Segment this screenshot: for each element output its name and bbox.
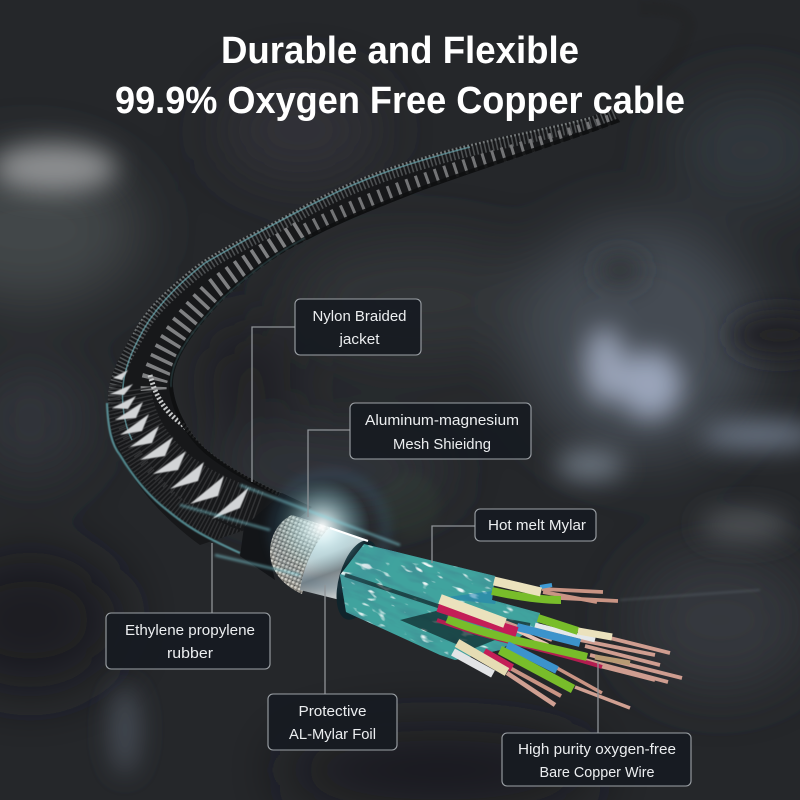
cable: nylon braided jacket	[90, 8, 689, 570]
inner shadow edge	[173, 122, 620, 495]
callout: nylon braided jacket: Nylon Braided	[312, 309, 406, 325]
callout: bare copper wire	[502, 662, 691, 786]
teal highlight	[123, 147, 470, 440]
callout: nylon braided jacket: jacket	[338, 332, 380, 348]
title line 2: 99.9% Oxygen Free Copper cable	[115, 80, 685, 122]
callout: aluminum-magnesium mesh: Aluminum-magnesium	[365, 413, 519, 429]
knurled aluminium mesh	[270, 515, 332, 594]
tapered stripes, far section	[302, 122, 610, 233]
woven lower body	[112, 385, 240, 540]
callout: ethylene propylene rubber: rubber	[167, 646, 213, 662]
title	[115, 30, 685, 122]
callout: protective foil: Protective	[298, 704, 366, 720]
callout: protective foil: AL-Mylar Foil	[289, 727, 376, 743]
silver mylar foil sleeve	[300, 527, 368, 600]
colored and copper wires	[437, 581, 682, 708]
lower wire group	[453, 643, 630, 708]
title line 1: Durable and Flexible	[221, 30, 579, 72]
callout: hot melt mylar	[432, 509, 596, 563]
bright inner woven strip	[150, 375, 280, 494]
top highlight	[133, 118, 590, 334]
callout: bare copper wire: High purity oxygen-free	[518, 742, 676, 758]
faint cable curl at top	[600, 8, 689, 122]
callout: nylon braided jacket	[252, 299, 421, 482]
wire bundle face	[328, 535, 388, 625]
callout: protective foil	[268, 585, 397, 750]
teal outer rim	[107, 403, 240, 553]
fine woven braid	[108, 108, 612, 405]
lens flare	[180, 473, 760, 600]
teal foil shielding bundle	[340, 544, 540, 660]
braid shards	[110, 370, 249, 519]
upper wire group	[492, 581, 618, 602]
middle wire group copper	[505, 622, 682, 682]
cable head: jacket end and knurled mesh	[240, 493, 368, 600]
callout: bare copper wire: Bare Copper Wire	[540, 765, 654, 781]
inner edge glow	[171, 238, 305, 387]
middle wire group insulation	[437, 599, 630, 667]
callout: ethylene propylene rubber: Ethylene propylene	[125, 623, 255, 639]
callout: hot melt mylar: Hot melt Mylar	[488, 518, 586, 534]
callout: aluminum-magnesium mesh	[308, 403, 531, 517]
callout: ethylene propylene rubber	[106, 543, 270, 669]
tapered stripes, curved section	[154, 233, 302, 393]
callout: aluminum-magnesium mesh: Mesh Shieidng	[393, 437, 491, 453]
